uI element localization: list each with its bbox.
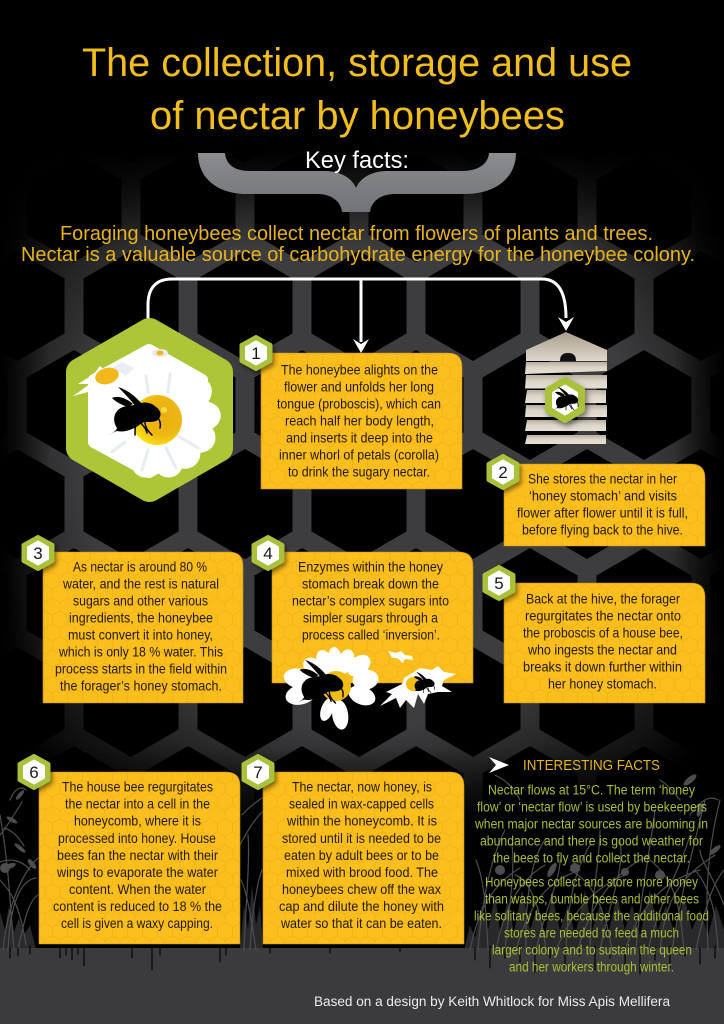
intro text: Nectar is a valuable source of carbohydrate energy for the honeybee colony.: [21, 243, 695, 266]
illustration: tiny petal cluster: [388, 651, 413, 663]
step text 3: sugars and other various: [73, 594, 208, 608]
step text 7: within the honeycomb. It is: [286, 814, 437, 828]
number badge 7: 7: [253, 763, 263, 782]
illustration: large daisy with bee: [282, 647, 380, 731]
step text 6: bees fan the nectar with their: [57, 848, 218, 863]
step text 1: to drink the sugary nectar.: [288, 464, 430, 480]
step text 7: stored until it is needed to be: [282, 831, 441, 846]
number badge 4: 4: [263, 544, 273, 563]
hive bee: [553, 387, 578, 410]
title: The collection, storage and use: [82, 41, 632, 85]
step text 2: flower after flower until it is full,: [517, 506, 688, 520]
step text 3: ingredients, the honeybee: [69, 610, 213, 626]
step text 5: breaks it down further within: [523, 660, 682, 674]
step text 3: process starts in the field within: [55, 662, 227, 676]
step text 1: and inserts it deep into the: [286, 430, 433, 446]
step text 5: her honey stomach.: [548, 676, 657, 692]
step text 7: honeybees chew off the wax: [282, 882, 441, 897]
step text 3: As nectar is around 80 %: [73, 560, 207, 574]
intro text: Foraging honeybees collect nectar from flowers of plants and trees.: [60, 222, 653, 245]
interesting facts paragraph 1: Nectar flows at 15°C. The term ‘honey: [488, 782, 695, 798]
step text 6: honeycomb, where it is: [74, 814, 201, 828]
step text 5: who ingests the nectar and: [527, 642, 677, 658]
interesting facts paragraph 1: the bees to fly and collect the nectar.: [493, 850, 690, 866]
credit line: Based on a design by Keith Whitlock for Miss Apis Mellifera: [314, 994, 670, 1009]
step text 7: mixed with brood food. The: [286, 865, 438, 880]
number badge 7: [244, 756, 272, 788]
interesting facts paragraph 1: flow’ or ‘nectar flow’ is used by beekeepers: [477, 800, 707, 814]
number badge 3: [24, 537, 52, 569]
step text 1: reach half her body length,: [285, 414, 434, 428]
step text 6: The house bee regurgitates: [62, 780, 213, 794]
step text 3: [55, 560, 227, 694]
intro text: [21, 222, 695, 266]
step text 7: eaten by adult bees or to be: [284, 848, 439, 863]
step text 7: cap and dilute the honey with: [279, 899, 444, 914]
number badge 3: 3: [33, 544, 43, 563]
interesting facts paragraph 2: Honeybees collect and store more honey: [485, 874, 698, 890]
number badge 4: [254, 537, 282, 569]
step text 3: must convert it into honey,: [68, 628, 213, 642]
step text 5: the proboscis of a house bee,: [523, 626, 683, 640]
step text 1: tongue (proboscis), which can: [277, 396, 441, 412]
step text 6: cell is given a waxy capping.: [61, 916, 213, 931]
honeycomb lattice background: [0, 141, 724, 834]
step text 1: [277, 362, 441, 480]
step text 4: stomach break down the: [302, 576, 439, 592]
interesting facts paragraph 1: [474, 782, 708, 866]
step text 7: sealed in wax-capped cells: [289, 796, 434, 812]
panel 1: honeybee alights: [261, 353, 462, 489]
step text 4: simpler sugars through a: [303, 610, 438, 626]
leaves and seed heads: [0, 773, 722, 880]
interesting facts paragraph 1: abundance and there is good weather for: [480, 834, 703, 848]
interesting facts paragraph 2: larger colony and to sustain the queen: [492, 942, 692, 958]
step text 2: She stores the nectar in her: [528, 472, 677, 486]
step text 6: the nectar into a cell in the: [65, 796, 210, 812]
interesting facts paragraph 2: stores are needed to feed a much: [504, 926, 679, 940]
panel 4: enzymes: [272, 552, 473, 683]
interesting facts paragraph 2: and her workers through winter.: [509, 960, 674, 974]
number badge 1: [242, 337, 270, 369]
bee on small daisy: [412, 672, 435, 693]
step text 6: processed into honey. House: [58, 831, 216, 846]
icon: beehive: [525, 332, 607, 444]
step text 4: nectar’s complex sugars into: [292, 594, 449, 608]
title: [82, 41, 632, 138]
interesting facts paragraph 2: than wasps, bumble bees and other bees: [485, 892, 699, 906]
main daisy petals: [127, 370, 222, 481]
step text 5: [523, 592, 683, 692]
number badge 5: [484, 567, 514, 599]
step text 7: water so that it can be eaten.: [280, 916, 442, 931]
curly brace: [198, 153, 516, 212]
number badge 6: 6: [29, 763, 39, 782]
number badge 2: [488, 456, 518, 488]
petal shading: [112, 374, 198, 470]
step text 6: content. When the water: [69, 882, 206, 897]
step text 4: Enzymes within the honey: [298, 560, 443, 574]
interesting facts paragraph 2: [474, 874, 709, 974]
key facts heading: Key facts:: [305, 147, 409, 174]
step text 7: [279, 780, 444, 931]
flower disc: [132, 395, 182, 445]
number badge 6: [20, 756, 48, 788]
icon: flower and bee in green hexagon: [73, 332, 222, 488]
interesting facts paragraph 1: when major nectar sources are blooming in: [474, 816, 708, 832]
hive green hexagon: [548, 380, 582, 420]
arrows: [148, 279, 574, 353]
step text 6: [53, 780, 222, 931]
step text 1: inner whorl of petals (corolla): [279, 448, 439, 462]
step text 3: which is only 18 % water. This: [58, 644, 223, 660]
panel 5: back at the hive: [504, 583, 705, 703]
step text 4: [292, 560, 449, 642]
panel 2: honey stomach: [504, 464, 705, 546]
bee on large daisy: [296, 660, 343, 703]
arrow icon: [489, 757, 509, 773]
step text 6: content is reduced to 18 % the: [53, 899, 222, 914]
number badge 1: 1: [251, 344, 261, 363]
ground and grass silhouette: [0, 773, 724, 1024]
panel 6: house bee: [39, 772, 240, 944]
step text 5: regurgitates the nectar onto: [525, 608, 681, 624]
interesting facts heading: INTERESTING FACTS: [523, 757, 660, 774]
step text 2: [517, 472, 688, 538]
step text 4: process called ‘inversion’.: [302, 628, 440, 642]
step text 3: the forager’s honey stomach.: [60, 678, 222, 694]
step text 7: The nectar, now honey, is: [292, 780, 432, 794]
number badge 5: 5: [494, 574, 504, 593]
step text 5: Back at the hive, the forager: [526, 592, 680, 606]
panel 7: sealed honey: [263, 772, 464, 944]
panel 3: convert into honey: [43, 552, 243, 703]
step text 2: before flying back to the hive.: [522, 522, 683, 538]
bee silhouette: [108, 387, 160, 435]
step text 1: The honeybee alights on the: [281, 362, 438, 378]
step text 1: flower and unfolds her long: [284, 380, 434, 394]
title: of nectar by honeybees: [150, 94, 565, 138]
step text 3: water, and the rest is natural: [62, 576, 219, 592]
illustration: small daisy with bee: [380, 666, 456, 708]
step text 2: ‘honey stomach’ and visits: [529, 488, 677, 504]
number badge 2: 2: [498, 463, 508, 482]
step text 6: wings to evaporate the water: [56, 865, 218, 880]
small daisy: [73, 349, 168, 402]
